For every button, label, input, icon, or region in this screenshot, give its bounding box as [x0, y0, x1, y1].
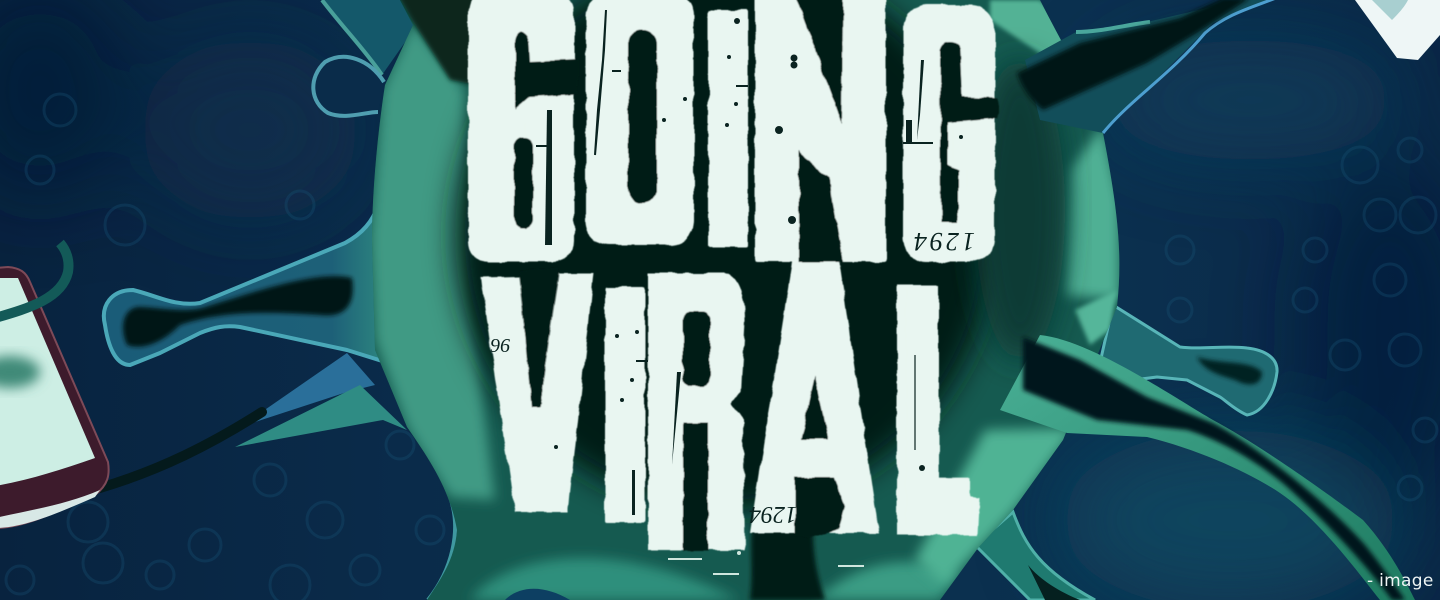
caption: - image: [1367, 571, 1434, 591]
title: GOING VIRAL: [468, 0, 998, 600]
title distress lettering: 1294: [911, 227, 975, 256]
spike: upper right: [1017, 0, 1276, 133]
spike: bottom right: [975, 512, 1095, 600]
title line 2: VIRAL: V: [495, 221, 583, 566]
spike: left knob: [104, 205, 395, 365]
title letters: [475, 0, 988, 600]
title line 2: VIRAL: L: [901, 226, 971, 590]
phone: top right: [1355, 0, 1440, 60]
specks under title: [668, 551, 864, 575]
title line 2: VIRAL: I: [610, 233, 640, 575]
virus body: [330, 0, 1130, 600]
title letter backing blocks: [468, 0, 995, 550]
spike: upper left with loop: [313, 0, 415, 116]
spike: bottom left edge: [428, 497, 455, 600]
phone cable: [0, 243, 69, 318]
title line 2: VIRAL: [495, 198, 971, 600]
body right dark shading: [975, 60, 1065, 360]
body highlights: [370, 0, 1120, 600]
body central dark core: [455, 0, 995, 510]
spike: lower right long tail: [1000, 335, 1415, 600]
title line 1: GOING: [475, 0, 988, 325]
spike: lower left thin arm: [100, 353, 407, 488]
phone screen smudge: [0, 356, 40, 388]
title distress lettering: 96: [490, 335, 510, 357]
spike: right knob: [1095, 305, 1277, 415]
phone: left: [0, 243, 109, 528]
bottom notch: [748, 516, 827, 600]
title distress lettering: 1294: [749, 501, 797, 527]
bottom blue wedges: [505, 589, 570, 600]
body base: [330, 0, 1130, 600]
title distress marks: [536, 10, 963, 515]
title line 2: VIRAL: A: [762, 198, 867, 600]
body top-left shadow: [400, 0, 472, 86]
title distress lettering: [490, 227, 975, 527]
title letter counters: [514, 0, 998, 551]
